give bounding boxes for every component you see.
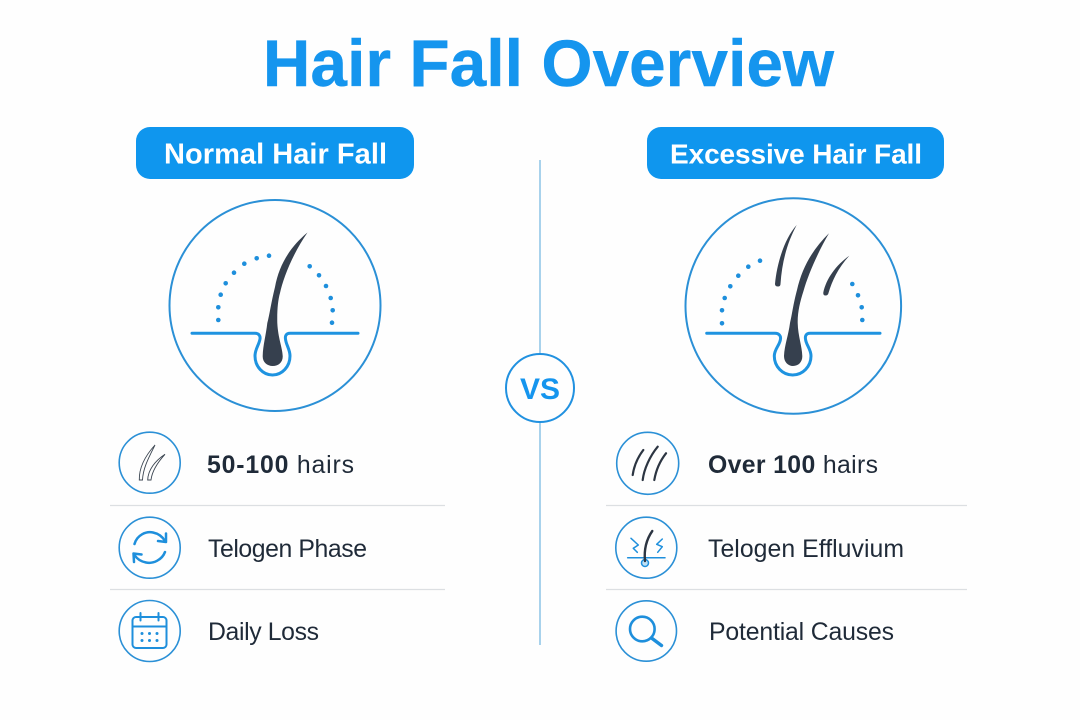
row: telogen effluvium: Telogen Effluvium <box>708 536 904 563</box>
heading pill: normal <box>136 127 414 179</box>
illustration: single hair follicle <box>170 200 380 411</box>
row: daily loss: Daily Loss <box>208 619 319 646</box>
row: over 100 hairs <box>617 432 878 494</box>
row: potential causes <box>616 601 894 661</box>
heading pill: excessive <box>647 127 944 179</box>
icon: cycle arrows <box>119 517 180 578</box>
icon: calendar <box>119 600 180 662</box>
row: over 100 hairs: Over 100 hairs <box>708 452 878 479</box>
row: telogen phase: Telogen Phase <box>208 536 367 563</box>
center divider <box>539 160 541 645</box>
row: daily loss <box>119 600 319 662</box>
icon: magnifying glass <box>616 601 676 661</box>
heading pill: normal: Normal Hair Fall <box>164 138 387 170</box>
VS badge <box>506 354 574 422</box>
row: 50-100 hairs <box>119 432 354 493</box>
panel: excessive hair fall <box>606 127 967 661</box>
row: telogen effluvium <box>616 517 904 578</box>
row: telogen phase <box>119 517 367 578</box>
icon: three hairs <box>617 432 679 494</box>
icon: stressed follicle <box>616 517 677 578</box>
title: Hair Fall Overview <box>263 27 835 100</box>
icon: fine hairs <box>119 432 180 493</box>
heading pill: excessive: Excessive Hair Fall <box>670 138 922 170</box>
panel: normal hair fall <box>110 127 445 662</box>
row: 50-100 hairs: 50-100 hairs <box>207 452 354 479</box>
row: potential causes: Potential Causes <box>709 619 894 646</box>
VS badge: VS <box>520 373 560 406</box>
illustration: multiple hairs shedding <box>686 198 901 414</box>
